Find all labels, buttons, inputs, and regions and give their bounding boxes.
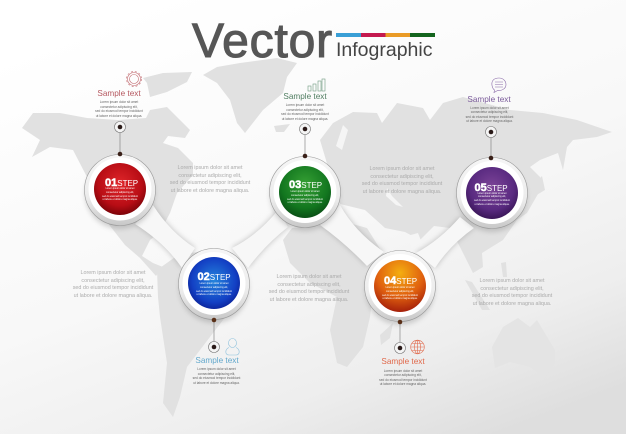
sample body 1: ut labore et dolore magna aliqua. [96, 114, 142, 118]
sample body 2: ut labore et dolore magna aliqua. [193, 381, 240, 385]
step 2 text: Lorem ipsum dolor sit amet [200, 282, 228, 285]
sample body 5: consectetur adipiscing elit, [471, 110, 508, 114]
lorem block D: Lorem ipsum dolor sit amet [276, 274, 342, 280]
world map [22, 58, 612, 417]
lorem block E: Lorem ipsum dolor sit amet [479, 278, 545, 284]
map: greenland [203, 58, 297, 133]
step 2 text: ut labore et dolore magna aliqua. [197, 293, 231, 296]
step 5 text [474, 192, 510, 206]
step 2 text: sed do eiusmod tempor incididunt [196, 290, 232, 293]
sample body 4: consectetur adipiscing elit, [384, 373, 422, 377]
ribbon shadows [135, 205, 474, 268]
step 4 text [382, 286, 418, 300]
step 2 text: consectetur adipiscing elit, [200, 286, 228, 289]
step 5 text: ut labore et dolore magna aliqua. [475, 203, 509, 206]
lorem block C: ut labore et dolore magna aliqua. [363, 189, 441, 195]
map: british isles [274, 124, 290, 132]
sample body 2 [192, 367, 240, 385]
step 4 label: 04STEP [384, 275, 417, 287]
connector ribbons [135, 205, 474, 268]
title accent bar [336, 33, 435, 37]
lorem block B: ut labore et dolore magna aliqua. [74, 293, 152, 299]
step 3 text: Lorem ipsum dolor sit amet [291, 190, 319, 193]
map: sumatra [465, 280, 490, 310]
sample body 1: consectetur adipiscing elit, [100, 105, 138, 109]
sample body 3: Lorem ipsum dolor sit amet [286, 103, 324, 107]
lorem block E [472, 278, 552, 307]
step 4 text: sed do eiusmod tempor incididunt [382, 294, 418, 297]
sample body 3: ut labore et dolore magna aliqua. [282, 117, 328, 121]
lorem block D: sed do eiusmod tempor incididunt [269, 289, 349, 295]
lorem block A: ut labore et dolore magna aliqua. [171, 188, 249, 194]
step 1 text: Lorem ipsum dolor sit amet [106, 187, 134, 190]
map: arctic islands [143, 72, 192, 97]
sample body 3 [281, 103, 329, 121]
step 2 text [196, 282, 232, 296]
lorem block A: consectetur adipiscing elit, [178, 173, 242, 179]
pin 3 [300, 124, 310, 158]
lorem block A [170, 165, 250, 194]
lorem block E: sed do eiusmod tempor incididunt [472, 293, 552, 299]
lorem block E: consectetur adipiscing elit, [480, 286, 544, 292]
step circle 1 [84, 154, 156, 229]
map: borneo [501, 262, 507, 277]
icon: gear [126, 72, 142, 86]
lorem block B: Lorem ipsum dolor sit amet [80, 270, 146, 276]
lorem block B: consectetur adipiscing elit, [81, 278, 145, 284]
lorem block C: consectetur adipiscing elit, [370, 174, 434, 180]
icon: bar chart [308, 79, 325, 91]
lorem block C: Lorem ipsum dolor sit amet [369, 166, 435, 172]
step circle 2 [178, 248, 250, 323]
lorem block D [269, 274, 350, 303]
step 2 label: 02STEP [198, 271, 231, 283]
sample body 4: sed do eiusmod tempor incididunt [379, 378, 427, 382]
icon: globe [411, 340, 424, 354]
sample body 4: Lorem ipsum dolor sit amet [384, 368, 422, 372]
step 4 text: ut labore et dolore magna aliqua. [383, 297, 417, 300]
sample body 2: Lorem ipsum dolor sit amet [197, 367, 236, 371]
map: madagascar [380, 323, 393, 345]
sample body 4: ut labore et dolore magna aliqua. [380, 382, 426, 386]
step 1 text: ut labore et dolore magna aliqua. [103, 198, 137, 201]
sample body 1: sed do eiusmod tempor incididunt [95, 109, 143, 113]
lorem block A: sed do eiusmod tempor incididunt [170, 180, 250, 186]
map: north america [22, 107, 193, 276]
subtitle: Infographic [336, 39, 432, 61]
pin 2 [208, 318, 220, 352]
step 3 text: sed do eiusmod tempor incididunt [287, 198, 323, 201]
sample body 1 [95, 100, 143, 118]
map: south america [157, 250, 246, 417]
lorem block C: sed do eiusmod tempor incididunt [362, 181, 442, 187]
sample body 5 [466, 106, 514, 123]
lorem block B [73, 270, 154, 299]
title: Vector [192, 14, 333, 68]
sample body 3: sed do eiusmod tempor incididunt [281, 112, 329, 116]
sample heading 3: Sample text [283, 92, 327, 101]
sample body 5: Lorem ipsum dolor sit amet [470, 106, 509, 110]
step 1 text [102, 187, 138, 201]
step circle 4 [364, 250, 436, 325]
icon: person [226, 338, 239, 355]
map: japan [535, 176, 545, 196]
lorem block E: ut labore et dolore magna aliqua. [473, 301, 551, 307]
step 1 label: 01STEP [105, 176, 138, 188]
step 3 text: ut labore et dolore magna aliqua. [288, 201, 322, 204]
map: australia [492, 318, 555, 378]
lorem block A: Lorem ipsum dolor sit amet [177, 165, 243, 171]
lorem block C [362, 166, 442, 195]
map: africa [283, 222, 396, 367]
step 5 text: Lorem ipsum dolor sit amet [478, 192, 506, 194]
step 4 text: consectetur adipiscing elit, [386, 290, 414, 293]
pin 1 [114, 122, 126, 156]
icon: speech bubble [492, 78, 506, 92]
step 4 text: Lorem ipsum dolor sit amet [386, 286, 414, 289]
pin 5 [486, 126, 496, 160]
step circle 5 [456, 158, 528, 232]
sample body 5: sed do eiusmod tempor incididunt [466, 115, 513, 119]
map: inland seas [336, 125, 423, 250]
step 1 text: sed do eiusmod tempor incididunt [102, 195, 138, 198]
pin 4 [394, 320, 406, 354]
sample body 1: Lorem ipsum dolor sit amet [100, 100, 138, 104]
step circle 3 [270, 156, 340, 231]
sample heading 1: Sample text [97, 89, 141, 98]
sample body 5: ut labore et dolore magna aliqua. [466, 119, 513, 123]
step 5 label: 05STEP [474, 182, 508, 194]
map: eurasia [320, 97, 612, 273]
step 5 text: consectetur adipiscing elit, [478, 195, 506, 198]
lorem block D: ut labore et dolore magna aliqua. [270, 297, 348, 303]
lorem block B: sed do eiusmod tempor incididunt [73, 285, 153, 291]
sample body 2: consectetur adipiscing elit, [198, 372, 235, 376]
sample heading 2: Sample text [195, 356, 239, 365]
step 1 text: consectetur adipiscing elit, [106, 191, 134, 194]
step 5 text: sed do eiusmod tempor incididunt [474, 199, 510, 202]
step 3 text [287, 190, 323, 204]
lorem block D: consectetur adipiscing elit, [277, 282, 341, 288]
step 3 text: consectetur adipiscing elit, [291, 194, 319, 197]
step 3 label: 03STEP [289, 178, 322, 190]
sample heading 4: Sample text [381, 357, 425, 366]
sample body 2: sed do eiusmod tempor incididunt [193, 376, 240, 380]
sample heading 5: Sample text [467, 95, 511, 104]
sample body 3: consectetur adipiscing elit, [286, 108, 324, 112]
sample body 4 [379, 368, 427, 386]
